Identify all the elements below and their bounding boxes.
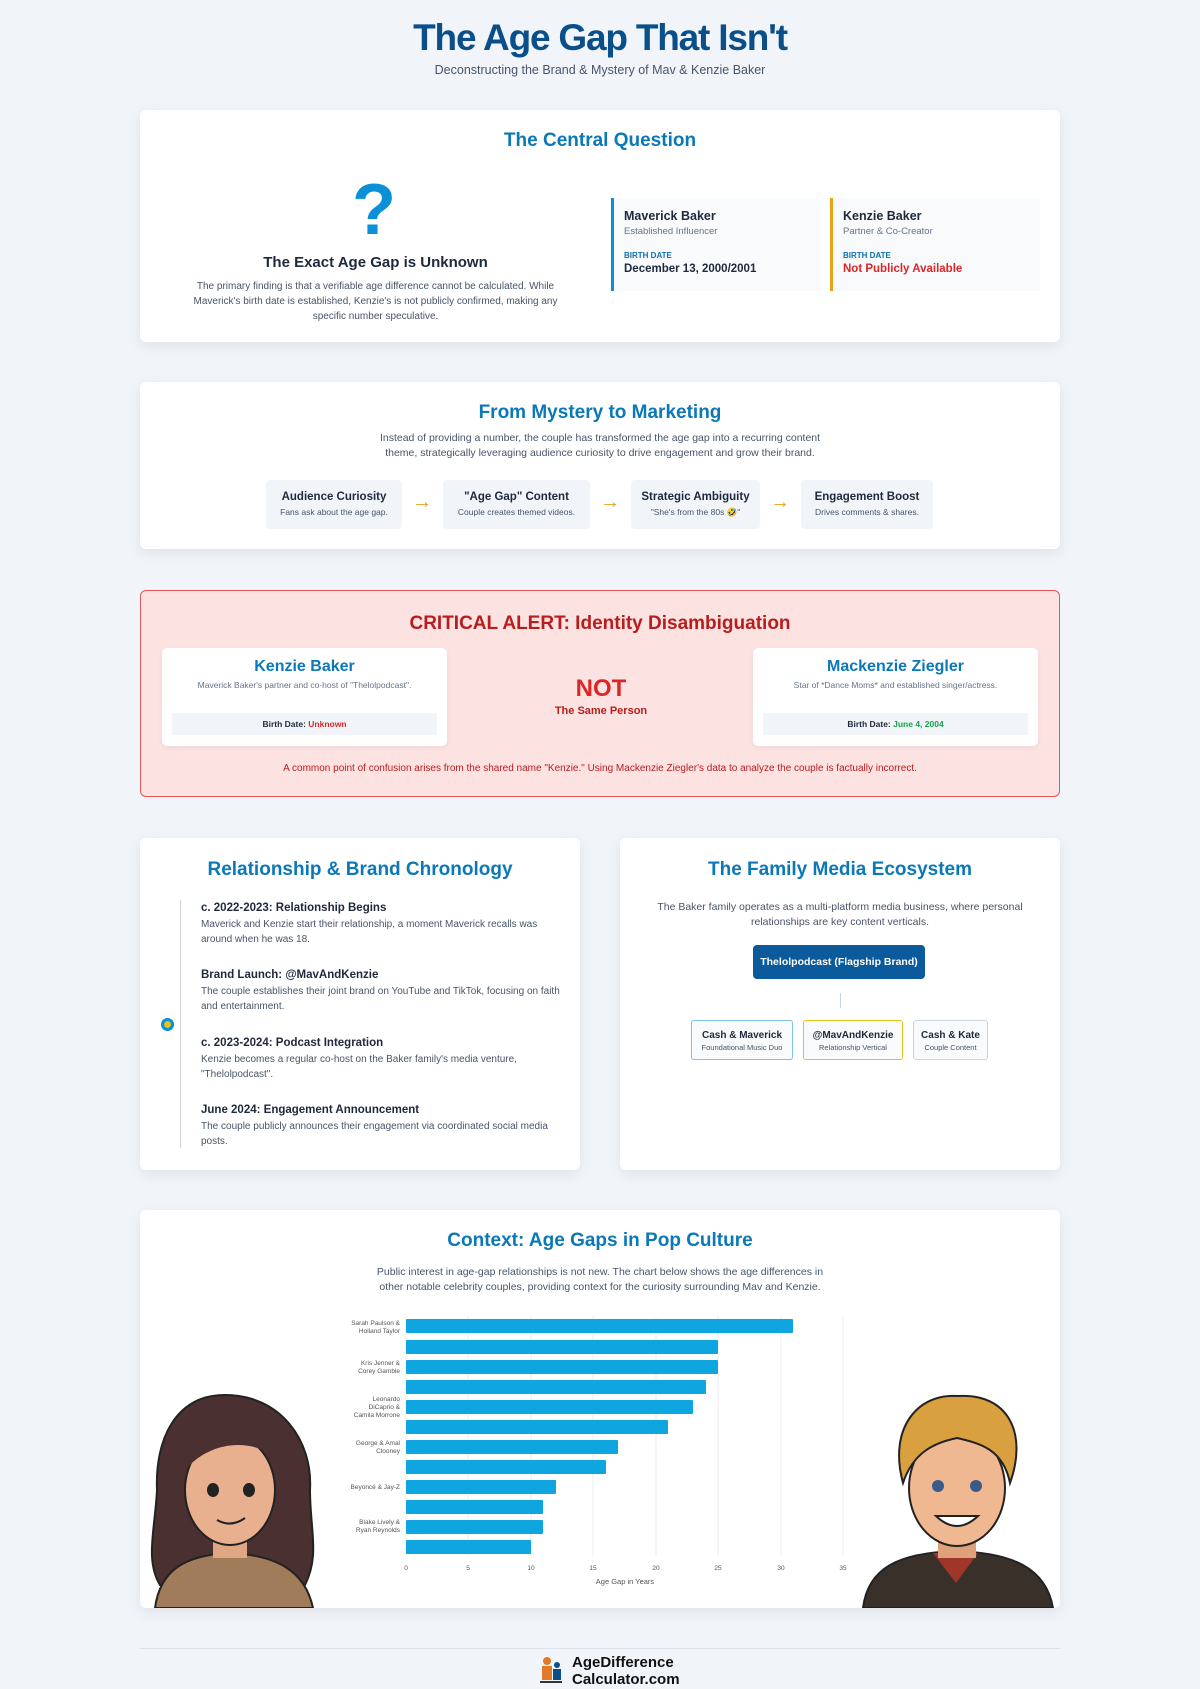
text: unknown gap: The Exact Age Gap is Unknown — [263, 254, 488, 271]
bar chart: Leonardo — [373, 1396, 400, 1403]
bar chart: DiCaprio & — [369, 1404, 401, 1411]
flow step 3 — [631, 480, 760, 529]
bar chart: Holland Taylor — [359, 1328, 401, 1335]
panel: mystery to marketing — [140, 382, 1060, 549]
footer logo: AgeDifference — [572, 1654, 674, 1671]
heading: The Central Question — [504, 130, 696, 151]
NOT label — [555, 675, 647, 717]
panel: age gaps chart — [140, 1210, 1060, 1608]
event 3: Kenzie becomes a regular co-host on the Baker family's media venture, "Thelolpodcast". — [201, 1054, 517, 1080]
event 1: c. 2022-2023: Relationship Begins — [201, 902, 386, 914]
profile: kenzie: Kenzie Baker — [843, 209, 922, 223]
flow step 4: Engagement Boost — [815, 491, 919, 503]
flow step 3: Strategic Ambiguity — [641, 491, 750, 503]
bar chart: 0 — [404, 1565, 408, 1572]
flagship node — [753, 945, 925, 979]
card: mackenzie ziegler — [753, 648, 1038, 746]
bar chart: Sarah Paulson & — [351, 1320, 401, 1327]
text: The Baker family operates as a multi-platform media business, where personal relationships are key content verticals. — [657, 901, 1023, 928]
flow step 4 — [801, 480, 933, 529]
heading: Context: Age Gaps in Pop Culture — [447, 1230, 753, 1251]
illustration: woman — [150, 1394, 314, 1608]
event 3: c. 2023-2024: Podcast Integration — [201, 1037, 383, 1049]
profile: maverick: December 13, 2000/2001 — [624, 263, 756, 275]
bar chart: Camila Morrone — [354, 1412, 400, 1419]
card: kenzie baker: Maverick Baker's partner and co-host of "Thelolpodcast". — [198, 680, 411, 690]
NOT label: The Same Person — [555, 705, 647, 717]
flow step 1 — [266, 480, 402, 529]
arrow: → — [600, 491, 620, 513]
node: cash & kate: Cash & Kate — [921, 1030, 980, 1041]
event 4 — [201, 1104, 548, 1147]
card: mackenzie ziegler: Star of *Dance Moms* and established singer/actress. — [794, 680, 997, 690]
heading: Relationship & Brand Chronology — [207, 859, 513, 880]
profile: maverick: BIRTH DATE — [624, 251, 672, 260]
arrow: → — [412, 491, 432, 513]
bar chart: 35 — [839, 1565, 847, 1572]
text: Public interest in age-gap relationships is not new. The chart below shows the age differences in other notable celebrity couples, providing context for the curiosity surrounding Mav and Kenzie. — [377, 1266, 823, 1293]
title: The Age Gap That Isn't — [413, 17, 787, 58]
panel: ecosystem — [620, 838, 1060, 1170]
flagship node: Thelolpodcast (Flagship Brand) — [760, 956, 918, 968]
bar chart: 15 — [589, 1565, 597, 1572]
flow step 3: "She's from the 80s 🤣" — [651, 507, 740, 517]
NOT label: NOT — [576, 675, 626, 702]
event 4: The couple publicly announces their engagement via coordinated social media posts. — [201, 1121, 548, 1147]
note: A common point of confusion arises from the shared name "Kenzie." Using Mackenzie Ziegler's data to analyze the couple is factually incorrect. — [283, 763, 917, 774]
card: mackenzie ziegler: Mackenzie Ziegler — [827, 658, 964, 675]
heading: The Family Media Ecosystem — [708, 859, 972, 880]
bar chart: 10 — [527, 1565, 535, 1572]
profile: kenzie: BIRTH DATE — [843, 251, 891, 260]
event 3 — [201, 1037, 517, 1080]
footer logo — [540, 1654, 680, 1688]
text: Instead of providing a number, the couple has transformed the age gap into a recurring content theme, strategically leveraging audience curiosity to drive engagement and grow their brand. — [380, 432, 820, 459]
bar chart: 25 — [714, 1565, 722, 1572]
node: cash & maverick: Cash & Maverick — [702, 1030, 782, 1041]
profile: maverick — [611, 198, 821, 291]
event 1: Maverick and Kenzie start their relationship, a moment Maverick recalls was around when he was 18. — [201, 919, 537, 945]
node: mavandkenzie — [803, 1020, 903, 1060]
flow step 2 — [443, 480, 590, 529]
panel: central question — [140, 110, 1060, 342]
arrow: → — [770, 491, 790, 513]
node: mavandkenzie: Relationship Vertical — [819, 1043, 887, 1052]
node: cash & kate — [913, 1020, 988, 1060]
bar chart: Ryan Reynolds — [356, 1527, 401, 1534]
card: kenzie baker: Birth Date: Unknown — [262, 719, 347, 729]
bar chart: George & Amal — [356, 1440, 401, 1447]
profile: kenzie — [830, 198, 1040, 291]
profile: kenzie: Not Publicly Available — [843, 263, 962, 275]
profile: maverick: Maverick Baker — [624, 209, 716, 223]
event 1 — [201, 902, 537, 945]
flow step 1: Audience Curiosity — [282, 491, 386, 503]
timeline dot — [161, 1018, 174, 1031]
bar chart: 30 — [777, 1565, 785, 1572]
bar chart: 5 — [466, 1565, 470, 1572]
card: kenzie baker: Kenzie Baker — [254, 658, 355, 675]
illustration: man — [862, 1394, 1054, 1608]
node: mavandkenzie: @MavAndKenzie — [813, 1030, 893, 1041]
heading: CRITICAL ALERT: Identity Disambiguation — [409, 613, 791, 634]
bar chart: Beyoncé & Jay-Z — [350, 1484, 400, 1491]
heading: From Mystery to Marketing — [479, 402, 721, 423]
node: cash & maverick — [691, 1020, 793, 1060]
bar chart: 20 — [652, 1565, 660, 1572]
event 2: Brand Launch: @MavAndKenzie — [201, 969, 378, 981]
node: cash & kate: Couple Content — [924, 1043, 977, 1052]
flow step 2: Couple creates themed videos. — [458, 507, 575, 517]
bar chart: Clooney — [376, 1448, 401, 1455]
event 2: The couple establishes their joint brand on YouTube and TikTok, focusing on faith and entertainment. — [201, 986, 560, 1012]
bar chart: Corey Gamble — [358, 1368, 400, 1375]
profile: maverick: Established Influencer — [624, 226, 717, 237]
icon: logo — [540, 1657, 562, 1683]
flow step 1: Fans ask about the age gap. — [280, 507, 388, 517]
bar chart: Blake Lively & — [359, 1519, 401, 1526]
subtitle: Deconstructing the Brand & Mystery of Mav & Kenzie Baker — [435, 63, 765, 77]
card: mackenzie ziegler: Birth Date: June 4, 2004 — [847, 719, 944, 729]
bar chart: Age Gap in Years — [596, 1577, 654, 1586]
bar chart: Kris Jenner & — [361, 1360, 401, 1367]
footer logo: Calculator.com — [572, 1671, 680, 1688]
panel: chronology — [140, 838, 580, 1170]
flow step 4: Drives comments & shares. — [815, 507, 919, 517]
card: kenzie baker — [162, 648, 447, 746]
icon: question mark: ? — [352, 170, 396, 250]
profile: kenzie: Partner & Co-Creator — [843, 226, 933, 237]
node: cash & maverick: Foundational Music Duo — [702, 1043, 782, 1052]
event 2 — [201, 969, 560, 1012]
flow step 2: "Age Gap" Content — [464, 491, 569, 503]
text: unknown gap — [194, 254, 558, 322]
event 4: June 2024: Engagement Announcement — [201, 1104, 419, 1116]
text: unknown gap: The primary finding is that a verifiable age difference cannot be calculated. While Maverick's birth date is established, Kenzie's is not publicly confirmed, making any specific number speculative. — [194, 281, 557, 322]
panel: critical alert — [140, 590, 1060, 797]
